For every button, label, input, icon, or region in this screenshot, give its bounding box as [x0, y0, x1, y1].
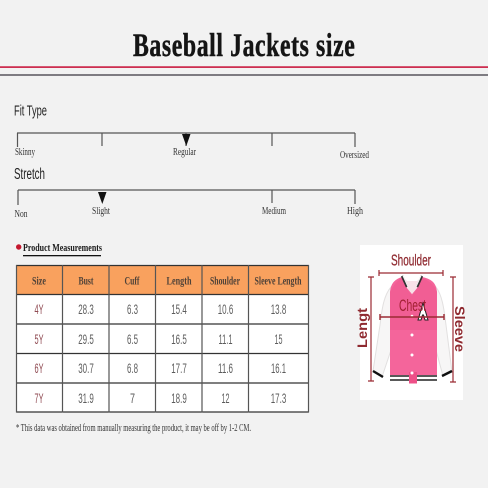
- scale labels: stretch: Medium: [262, 206, 286, 217]
- table values: 6.5: [127, 332, 138, 347]
- measure: length: Lengt: [355, 307, 370, 348]
- jacket letter: [418, 303, 428, 320]
- jacket cuffs: [373, 371, 452, 377]
- table values: 17.7: [171, 361, 187, 376]
- scale labels: stretch: Slight: [92, 206, 110, 217]
- jacket sleeves: [373, 287, 452, 377]
- table values: 7: [130, 391, 135, 406]
- section heading: product measurements: [16, 242, 103, 256]
- measure: chest: [380, 296, 444, 320]
- header labels: Length: [166, 274, 192, 288]
- measure: sleeve: Sleeve: [452, 306, 467, 353]
- scale labels: fit type: Oversized: [340, 150, 369, 161]
- header labels: Bust: [78, 274, 94, 288]
- marker: slight: [98, 192, 106, 204]
- measure: chest: Chest: [399, 296, 426, 315]
- size labels: [34, 302, 44, 406]
- scale: stretch: [14, 190, 363, 220]
- scale labels: fit type: [15, 147, 369, 161]
- table values: 18.9: [171, 391, 187, 406]
- jacket body: [390, 277, 437, 376]
- scale: fit type: [15, 133, 369, 161]
- measure: shoulder: [379, 252, 443, 276]
- table values: 11.6: [218, 361, 233, 376]
- size labels: 6Y: [34, 361, 44, 376]
- table values: [78, 302, 286, 406]
- collar: [403, 277, 422, 294]
- scale labels: stretch: [14, 206, 363, 220]
- table values: 6.8: [127, 361, 138, 376]
- scale labels: fit type: Regular: [173, 147, 196, 158]
- table values: 16.5: [171, 332, 187, 347]
- size labels: 5Y: [34, 332, 44, 347]
- jacket buttons: [410, 315, 414, 374]
- heading: stretch: Stretch: [14, 166, 45, 183]
- table values: 6.3: [127, 302, 138, 317]
- table values: 15.4: [171, 302, 187, 317]
- table values: 15: [274, 332, 282, 347]
- table header: [16, 265, 309, 294]
- table values: 11.1: [218, 332, 232, 347]
- footnote: * This data was obtained from manually measuring the product, it may be off by 1-2 CM.: [16, 423, 251, 434]
- table values: 30.7: [78, 361, 94, 376]
- measurement table: [16, 265, 309, 412]
- measure: shoulder: Shoulder: [391, 252, 431, 270]
- table values: 17.3: [271, 391, 286, 406]
- jacket hem: [390, 375, 437, 382]
- size labels: 7Y: [34, 391, 44, 406]
- table values: 31.9: [78, 391, 94, 406]
- header labels: Shoulder: [210, 274, 240, 288]
- title: Baseball Jackets size: [133, 27, 355, 64]
- scale labels: fit type: Skinny: [15, 147, 35, 158]
- scale labels: stretch: High: [347, 206, 363, 217]
- table values: 16.1: [271, 361, 286, 376]
- table values: 10.6: [218, 302, 233, 317]
- table body: [16, 294, 309, 412]
- section heading: product measurements: Product Measurements: [23, 242, 103, 254]
- marker: regular: [182, 134, 190, 146]
- header labels: Sleeve Length: [254, 274, 302, 288]
- header labels: Size: [32, 274, 46, 288]
- header labels: [32, 274, 302, 288]
- heading: fit type: Fit Type: [14, 102, 47, 120]
- measure: length: [355, 277, 374, 381]
- header labels: Cuff: [124, 274, 140, 288]
- table values: 29.5: [78, 332, 94, 347]
- size labels: 4Y: [34, 302, 44, 317]
- table values: 28.3: [78, 302, 94, 317]
- icon: jacket: [373, 276, 452, 384]
- header rules: [0, 66, 488, 76]
- table values: 12: [222, 391, 230, 406]
- measure: sleeve: [450, 277, 467, 382]
- table values: 13.8: [271, 302, 286, 317]
- jacket diagram panel: [355, 245, 467, 400]
- scale labels: stretch: Non: [14, 209, 28, 220]
